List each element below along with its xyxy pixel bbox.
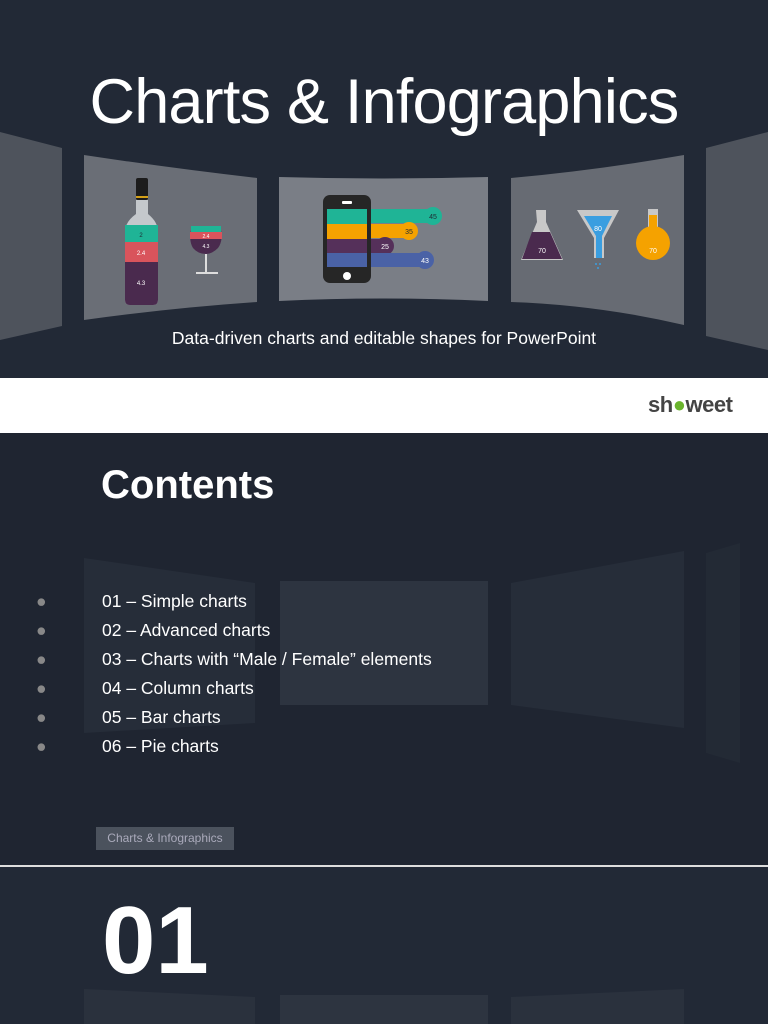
panel: phone: 35 <box>405 229 413 236</box>
icon: conical flask: 70 <box>538 248 546 255</box>
slide 2: contents <box>0 433 768 865</box>
panel: wine <box>84 155 257 320</box>
panel: phone: 25 <box>381 244 389 251</box>
panel: left edge <box>0 132 62 340</box>
title: Charts & Infographics <box>90 67 678 137</box>
list: contents items: ● <box>36 620 47 640</box>
icon: phone <box>323 195 371 283</box>
slide 1: title slide <box>0 0 768 378</box>
panel: phone <box>279 177 488 301</box>
icon: wine glass <box>190 226 222 274</box>
list: contents items: 02 – Advanced charts <box>102 620 270 640</box>
heading: Contents: Contents <box>101 463 274 507</box>
icon: round flask <box>636 209 670 260</box>
tag: footer label <box>96 827 234 850</box>
list: contents items: 04 – Column charts <box>102 678 254 698</box>
panel: right edge <box>706 132 768 350</box>
list: contents items: 01 – Simple charts <box>102 591 247 611</box>
list: contents items: ● <box>36 736 47 756</box>
list: contents items: ● <box>36 707 47 727</box>
panel: flasks <box>511 155 684 325</box>
footer band with logo <box>0 378 768 433</box>
panel: phone: 45 <box>429 214 437 221</box>
icon: wine bottle: 2 <box>139 233 143 239</box>
icon: wine glass: 4.3 <box>203 244 210 250</box>
logo: showeet: sh●weet <box>648 392 732 417</box>
list: contents items: 03 – Charts with “Male / Female” elements <box>102 649 432 669</box>
list: contents items: 06 – Pie charts <box>102 736 219 756</box>
icon: wine glass: 2.4 <box>203 234 210 240</box>
tag: footer label: Charts & Infographics <box>107 831 223 845</box>
subtitle: Data-driven charts and editable shapes for PowerPoint <box>172 328 596 348</box>
icon: conical flask <box>521 210 563 260</box>
icon: funnel <box>577 210 619 269</box>
icon: wine bottle <box>125 178 158 305</box>
heading: 01: 01 <box>102 887 209 994</box>
list: contents items <box>36 591 432 756</box>
list: contents items: ● <box>36 649 47 669</box>
list: contents items: 05 – Bar charts <box>102 707 221 727</box>
slide 3: section 01 <box>0 867 768 1024</box>
icon: wine bottle: 2.4 <box>137 251 146 257</box>
list: contents items: ● <box>36 591 47 611</box>
icon: wine bottle: 4.3 <box>137 281 146 287</box>
panel: phone: 43 <box>421 258 429 265</box>
icon: round flask: 70 <box>649 248 657 255</box>
list: contents items: ● <box>36 678 47 698</box>
icon: funnel: 80 <box>594 226 602 233</box>
